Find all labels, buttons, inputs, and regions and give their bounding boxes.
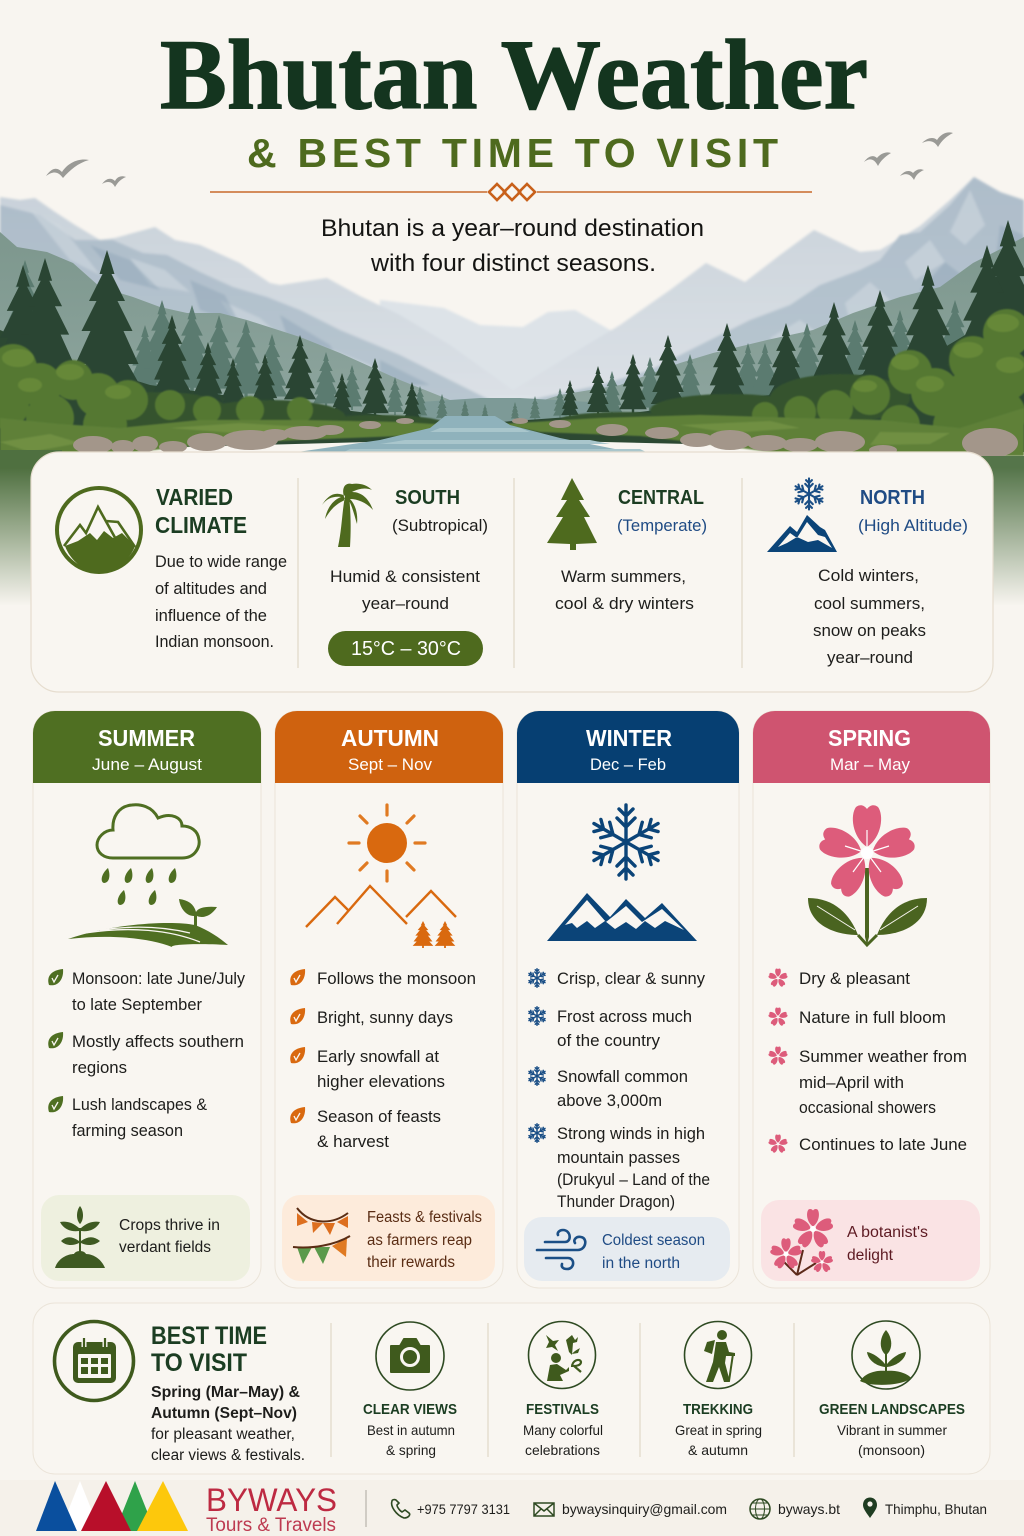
callout: feasts: their rewards	[367, 1254, 455, 1271]
autumn bullets: Early snowfall at	[317, 1047, 439, 1066]
logo: byways wordmark	[206, 1482, 337, 1536]
temperature pill	[328, 631, 483, 666]
spring bullets	[768, 968, 967, 1154]
river rocks	[73, 418, 1018, 458]
heading: best time	[151, 1322, 267, 1377]
callout: coldest season: Coldest season	[602, 1232, 705, 1249]
callout: feasts: Feasts & festivals	[367, 1209, 482, 1226]
autumn header: Sept – Nov	[348, 755, 432, 774]
winter bullets: Snowfall common	[557, 1067, 688, 1086]
riverbank grass	[0, 418, 448, 456]
region: south	[330, 487, 488, 613]
callout: botanist: delight	[847, 1247, 894, 1264]
winter bullets: of the country	[557, 1031, 660, 1050]
text: best time details: Spring (Mar–May) &	[151, 1384, 300, 1401]
region: central: cool & dry winters	[555, 594, 694, 613]
item: clear views: & spring	[386, 1442, 436, 1458]
icon: flower	[808, 805, 927, 945]
winter bullets: above 3,000m	[557, 1091, 662, 1110]
callout: feasts	[282, 1195, 495, 1281]
item: trekking: TREKKING	[683, 1401, 753, 1418]
region: central: Warm summers,	[561, 567, 686, 586]
item: clear views: Best in autumn	[367, 1422, 455, 1438]
heading: varied climate	[155, 484, 247, 538]
callout: crops: Crops thrive in	[119, 1217, 220, 1234]
callout: botanist	[761, 1200, 980, 1281]
logo: byways mountains	[36, 1481, 188, 1531]
region: central: (Temperate)	[617, 516, 707, 535]
panel: summer	[33, 711, 261, 1288]
autumn bullets: Bright, sunny days	[317, 1008, 453, 1027]
lower side forest strips	[0, 450, 62, 605]
summer bullets: regions	[72, 1058, 127, 1077]
region: north	[813, 487, 968, 667]
region: north: year–round	[827, 648, 913, 667]
left back ridge	[0, 197, 520, 420]
item: festivals: FESTIVALS	[526, 1401, 599, 1418]
spring bullets: Nature in full bloom	[799, 1008, 946, 1027]
autumn bullets: higher elevations	[317, 1072, 445, 1091]
callout: crops	[41, 1195, 250, 1281]
illustration: mountain valley landscape	[0, 177, 1024, 606]
mountains	[0, 177, 1024, 420]
summer header: June – August	[92, 755, 202, 774]
spring header	[753, 711, 990, 783]
contact: location: Thimphu, Bhutan	[885, 1501, 987, 1517]
autumn header: AUTUMN	[341, 725, 439, 751]
icon: sun and mountains	[306, 805, 456, 948]
contact: website	[750, 1499, 840, 1519]
callout: feasts: as farmers reap	[367, 1232, 472, 1249]
winter bullets: Thunder Dragon)	[557, 1192, 675, 1211]
birds	[46, 132, 953, 187]
panel: spring	[753, 711, 990, 1288]
region: north: (High Altitude)	[858, 516, 968, 535]
autumn bullets: Follows the monsoon	[317, 969, 476, 988]
autumn header	[275, 711, 503, 783]
text: climate description	[155, 552, 287, 651]
logo: byways wordmark: BYWAYS	[206, 1482, 337, 1518]
text: climate description: influence of the	[155, 606, 267, 625]
callout: coldest season	[524, 1217, 730, 1281]
region: south: Humid & consistent	[330, 567, 480, 586]
callout: coldest season: in the north	[602, 1255, 680, 1272]
heading: best time: BEST TIME	[151, 1322, 267, 1350]
winter bullets: Strong winds in high	[557, 1124, 705, 1143]
region: south: year–round	[362, 594, 449, 613]
title: Bhutan Weather	[160, 19, 868, 130]
spring bullets: Summer weather from	[799, 1047, 967, 1066]
item: trekking: & autumn	[688, 1442, 748, 1458]
callout: crops: verdant fields	[119, 1239, 211, 1256]
intro text: Bhutan is a year–round destination	[321, 215, 704, 242]
region: north: Cold winters,	[818, 566, 919, 585]
heading: varied climate: VARIED	[156, 484, 233, 510]
spring header: SPRING	[828, 725, 911, 751]
region: south: (Subtropical)	[392, 516, 488, 535]
divider with diamonds	[210, 184, 812, 200]
far central mountains	[380, 300, 700, 400]
shrubs: highlights	[2, 314, 1024, 399]
icon: mountain badge	[57, 488, 141, 573]
contact: website: byways.bt	[778, 1501, 840, 1517]
summer bullets: farming season	[72, 1121, 183, 1140]
shrubs: main foliage	[0, 309, 1024, 447]
autumn bullets: & harvest	[317, 1132, 389, 1151]
winter bullets: Frost across much	[557, 1007, 692, 1026]
winter header	[517, 711, 739, 783]
panel: autumn	[275, 711, 503, 1288]
item: green landscapes	[819, 1321, 965, 1458]
dark undergrowth	[90, 374, 910, 433]
misty forest slopes	[0, 232, 470, 430]
autumn bullets	[290, 969, 476, 1151]
panel: winter	[517, 711, 739, 1288]
footer band	[0, 1480, 1024, 1536]
icon: snowy peak	[767, 478, 837, 552]
fade into page	[0, 468, 1024, 606]
foreground conifers	[0, 220, 1024, 424]
summer header: SUMMER	[98, 725, 195, 751]
contact: phone: +975 7797 3131	[417, 1501, 510, 1517]
winter header: Dec – Feb	[590, 755, 666, 774]
temperature pill: 15°C – 30°C	[351, 638, 461, 660]
panel: varied climate	[31, 452, 993, 692]
region: central	[555, 487, 707, 613]
item: trekking	[675, 1322, 762, 1458]
distant misty treeline	[7, 260, 973, 420]
item: trekking: Great in spring	[675, 1422, 762, 1438]
nearer left ridge	[0, 205, 500, 420]
summer bullets: Lush landscapes &	[72, 1095, 208, 1114]
nearer right ridge	[505, 177, 1024, 420]
text: climate description: of altitudes and	[155, 579, 267, 598]
region: north: NORTH	[860, 487, 925, 509]
intro text	[321, 215, 704, 277]
item: festivals	[523, 1322, 603, 1458]
heading: varied climate: CLIMATE	[155, 512, 247, 538]
item: clear views: CLEAR VIEWS	[363, 1401, 457, 1418]
item: clear views	[363, 1322, 457, 1458]
icon: calendar	[54, 1322, 134, 1400]
icon: conifer	[547, 478, 597, 550]
heading: best time: TO VISIT	[151, 1349, 247, 1377]
winter header: WINTER	[586, 725, 672, 751]
text: climate description: Due to wide range	[155, 552, 287, 571]
ridge light facets	[30, 190, 985, 385]
summer bullets	[48, 969, 245, 1140]
intro text: with four distinct seasons.	[370, 250, 656, 277]
dark forest base	[0, 330, 445, 452]
spring bullets: Dry & pleasant	[799, 969, 910, 988]
item: green landscapes: (monsoon)	[858, 1442, 925, 1458]
winter bullets: mountain passes	[557, 1148, 680, 1167]
icon: palm tree	[322, 484, 373, 547]
contact: location	[863, 1498, 987, 1518]
icon: snowflake and mountains	[547, 805, 697, 941]
text: best time details: Autumn (Sept–Nov)	[151, 1405, 297, 1422]
item: green landscapes: Vibrant in summer	[837, 1422, 947, 1438]
panel: best time to visit	[33, 1303, 990, 1474]
spring header: Mar – May	[830, 755, 910, 774]
subtitle: & BEST TIME TO VISIT	[247, 130, 778, 176]
spring bullets: mid–April with	[799, 1073, 904, 1092]
icon: rain cloud and field	[68, 805, 228, 947]
item: festivals: celebrations	[525, 1442, 600, 1458]
valley floor haze	[420, 398, 600, 425]
spring bullets: occasional showers	[799, 1098, 936, 1117]
autumn bullets: Season of feasts	[317, 1107, 441, 1126]
text: best time details	[151, 1384, 305, 1464]
item: green landscapes: GREEN LANDSCAPES	[819, 1401, 965, 1418]
region: south: SOUTH	[395, 487, 460, 509]
callout: botanist: A botanist's	[847, 1224, 928, 1241]
region: north: cool summers,	[814, 594, 925, 613]
item: festivals: Many colorful	[523, 1422, 603, 1438]
spring bullets: Continues to late June	[799, 1135, 967, 1154]
winter bullets: (Drukyul – Land of the	[557, 1170, 710, 1189]
river	[270, 416, 650, 456]
summer bullets: Monsoon: late June/July	[72, 969, 245, 988]
text: climate description: Indian monsoon.	[155, 632, 274, 651]
logo: byways wordmark: Tours & Travels	[206, 1515, 336, 1536]
summer bullets: Mostly affects southern	[72, 1032, 244, 1051]
text: best time details: clear views & festivals.	[151, 1447, 305, 1464]
ridge dark facets	[90, 225, 1024, 385]
winter bullets	[528, 969, 710, 1211]
region: central: CENTRAL	[618, 487, 704, 509]
contact: email: bywaysinquiry@gmail.com	[562, 1501, 727, 1517]
foreground foliage	[0, 309, 1024, 456]
summer header	[33, 711, 261, 783]
text: best time details: for pleasant weather,	[151, 1426, 295, 1443]
summer bullets: to late September	[72, 995, 202, 1014]
right back ridge	[505, 177, 1024, 420]
winter bullets: Crisp, clear & sunny	[557, 969, 705, 988]
region: north: snow on peaks	[813, 621, 926, 640]
contact: phone	[392, 1500, 510, 1518]
